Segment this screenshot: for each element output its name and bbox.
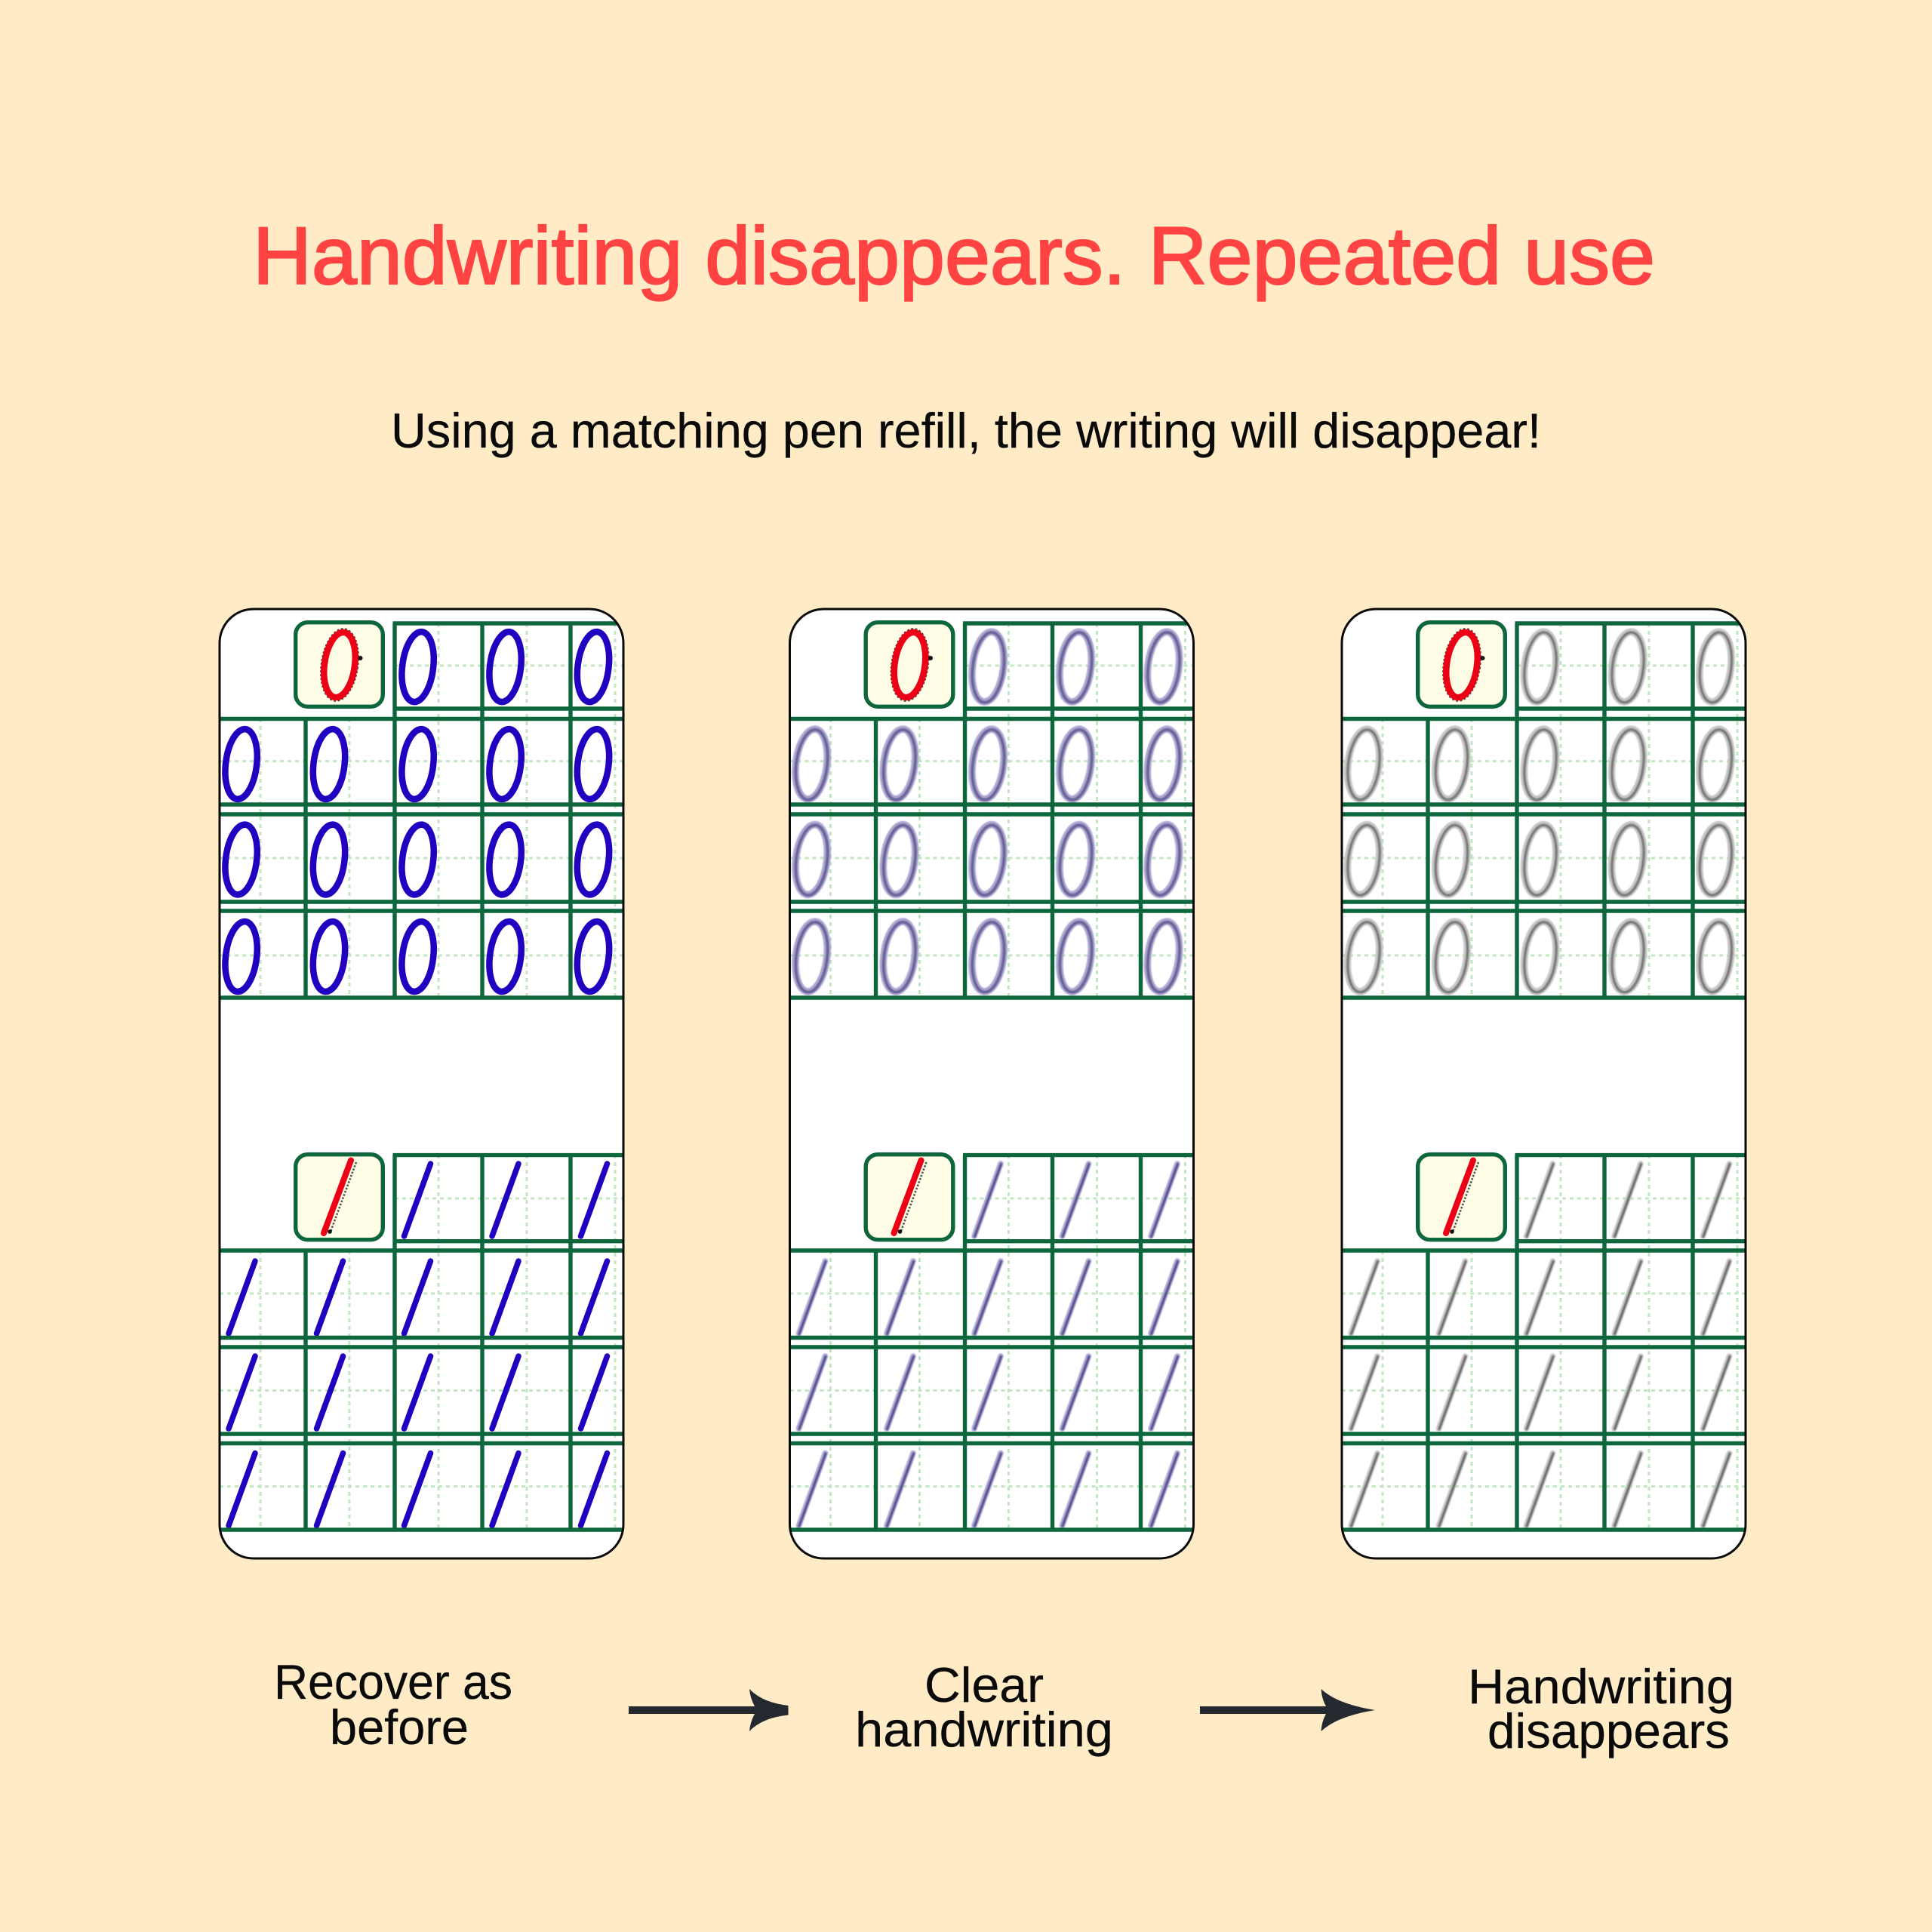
model characters in highlighted boxes [296,623,383,1240]
label: handwriting disappears: disappears [1487,1703,1730,1758]
label: recover as before: Recover as [274,1654,512,1709]
label: clear handwriting [855,1657,1113,1757]
label: clear handwriting: handwriting [855,1702,1113,1757]
model characters, handwriting disappears panel [1418,623,1505,1240]
panel: recover as before [220,609,623,1558]
label: recover as before: before [330,1700,469,1755]
title: Handwriting disappears. Repeated use [253,210,1655,301]
label: clear handwriting: Clear [924,1657,1044,1712]
label: handwriting disappears: Handwriting [1468,1659,1734,1714]
subtitle: Using a matching pen refill, the writing will disappear! [391,404,1541,458]
label: recover as before [274,1654,512,1755]
arrow: step one to step two [629,1689,788,1731]
panel: handwriting disappears [1342,609,1746,1558]
arrow: step two to step three [1200,1689,1375,1731]
label: handwriting disappears [1468,1659,1734,1758]
model characters, clear handwriting panel [866,623,953,1240]
panel: clear handwriting [789,609,1194,1558]
